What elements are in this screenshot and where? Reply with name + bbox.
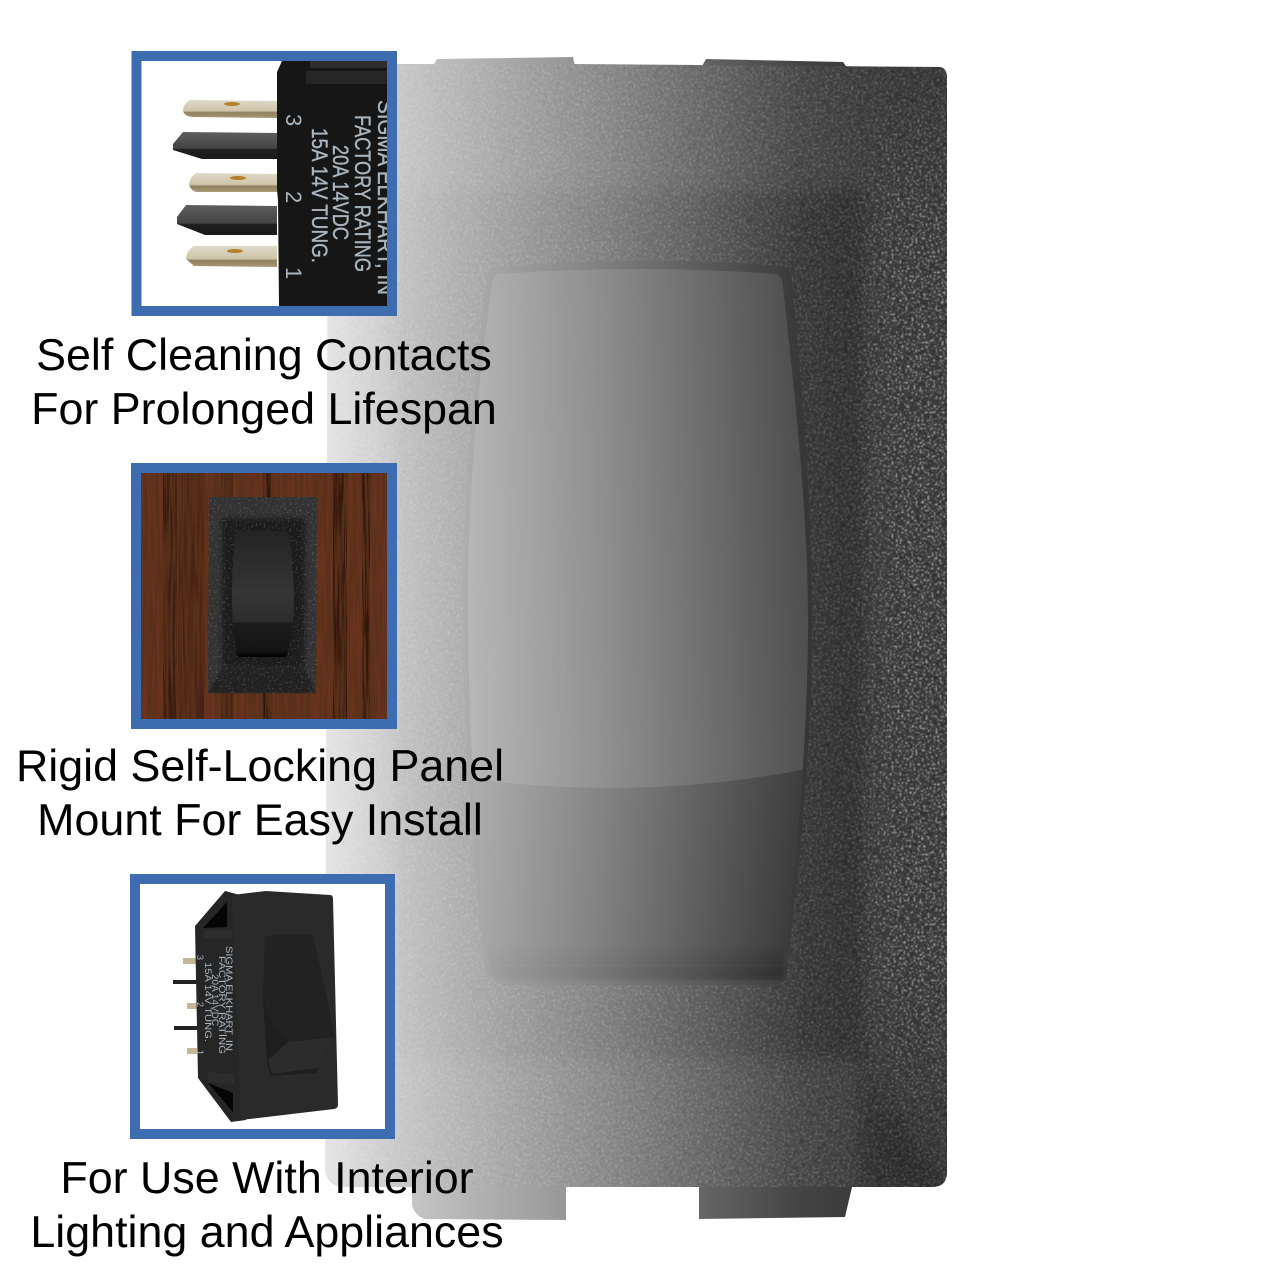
switch body with printed rating: 1 [281, 267, 306, 279]
mounting tabs [412, 57, 852, 1220]
switch faceplate [320, 60, 950, 1190]
switch body with printed rating: SIGMA ELKHART, IN [373, 100, 398, 295]
switch body with printed rating [277, 61, 398, 306]
main switch photo faded to white [300, 40, 960, 1240]
contact pins [173, 958, 198, 1054]
switch body with printed rating: FACTORY RATING [350, 115, 375, 272]
caption 2: Rigid Self-Locking Panel [16, 741, 504, 791]
inset box: panel mount on wood [136, 468, 392, 724]
rocker button [463, 260, 812, 985]
tan terminal 2 [189, 173, 277, 192]
mini switch plate [208, 497, 317, 693]
switch body side: 3 [195, 955, 205, 960]
switch body with printed rating: 15A 14V TUNG. [307, 128, 332, 263]
caption 3: For Use With Interior [60, 1153, 474, 1203]
switch front face [232, 891, 338, 1120]
caption 3 second line: Lighting and Appliances [30, 1207, 504, 1257]
switch body side: 20A 14VDC [210, 974, 220, 1027]
black terminal 2 [177, 205, 277, 235]
switch body side: 15A 14V TUNG. [203, 962, 213, 1042]
caption 2 second line: Mount For Easy Install [37, 795, 483, 845]
mini rocker [232, 531, 294, 657]
switch body side: 1 [195, 1050, 205, 1055]
switch body side [195, 891, 246, 1122]
rocker [263, 934, 335, 1076]
switch body with printed rating: 2 [281, 191, 306, 203]
caption 1 second line: For Prolonged Lifespan [31, 384, 497, 434]
tan terminal 3 [186, 246, 277, 267]
inset box: switch side view [135, 879, 390, 1134]
white fade overlay [300, 40, 960, 1240]
switch body with printed rating: 3 [281, 114, 306, 126]
switch body side: 2 [195, 1002, 205, 1007]
wood grain [141, 473, 387, 719]
caption 1: Self Cleaning Contacts [36, 330, 492, 380]
tan terminal 1 [183, 100, 277, 118]
inset box: terminals [136, 56, 398, 311]
switch body with printed rating: 20A 14VDC [328, 145, 353, 240]
black terminal 1 [173, 132, 277, 159]
switch body side: FACTORY RATING [217, 956, 227, 1054]
switch body side: SIGMA ELKHART, IN [224, 946, 234, 1051]
terminal holes [224, 102, 246, 253]
